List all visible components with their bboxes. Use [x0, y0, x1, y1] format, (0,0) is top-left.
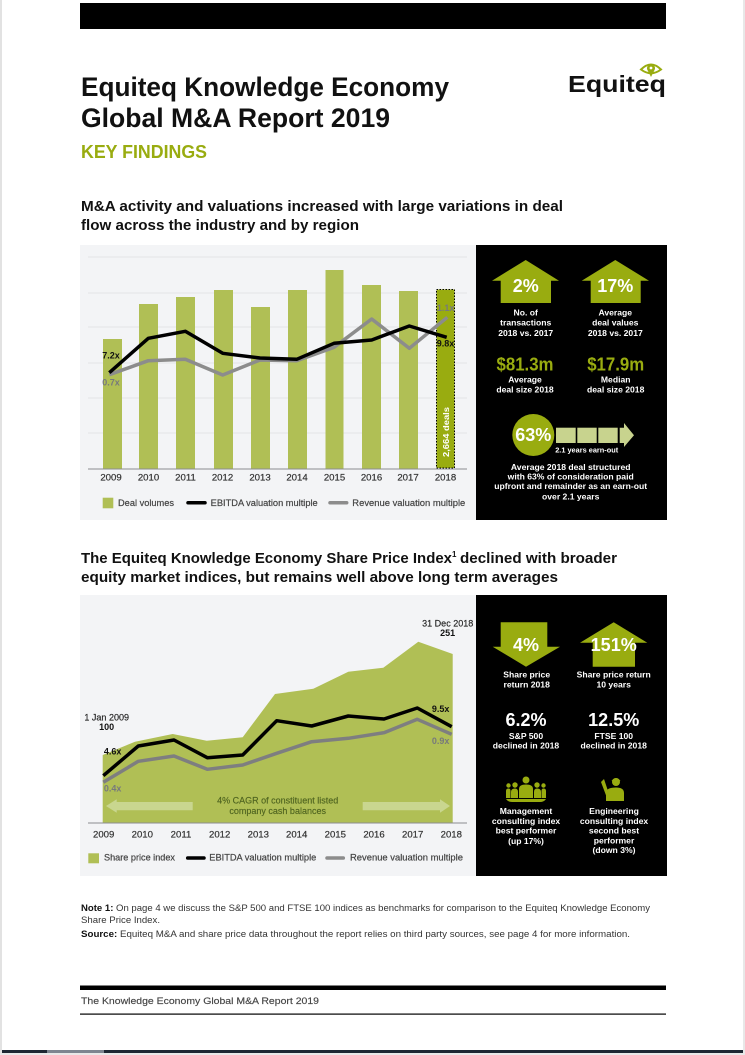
x axis years: 2017 — [402, 830, 423, 841]
stat: median deal size — [587, 355, 645, 395]
text: earn-out description: Average 2018 deal structured — [511, 462, 630, 472]
data labels: 251 — [440, 628, 455, 638]
circle: 63% — [512, 414, 554, 456]
heading: M&A activity: M&A activity and valuations increased with large variations in deal — [81, 199, 563, 215]
label: deal values: deal values — [592, 318, 639, 328]
label: engineering consulting: performer — [594, 835, 635, 845]
legend: Share price index — [104, 853, 175, 863]
legend: Revenue valuation multiple — [350, 853, 463, 863]
x axis years: 2016 — [361, 473, 382, 484]
label: deal values: Average — [598, 308, 632, 318]
stat: median deal size: $17.9m — [587, 355, 644, 375]
label: deal values: 2018 vs. 2017 — [588, 328, 643, 338]
arrow: share price return up 151% — [580, 622, 647, 667]
stat: S&P 500: S&P 500 — [509, 731, 543, 741]
x axis years: 2009 — [100, 473, 122, 484]
stat: FTSE 100: declined in 2018 — [580, 741, 647, 751]
notes: Note 1: On page 4 we discuss the S&P 500 and FTSE 100 indices as benchmarks for comparison to the Equiteq Knowledge Economy — [81, 903, 651, 913]
legend — [88, 853, 463, 863]
label: management consulting: Management — [500, 806, 552, 816]
highlighted bar 2018: 2,664 deals — [441, 407, 451, 457]
data labels: 7.2x — [102, 351, 120, 361]
x axis years: 2010 — [132, 830, 153, 841]
legend: EBITDA valuation multiple — [211, 498, 318, 508]
x axis years: 2014 — [286, 473, 308, 484]
arrow: share price return down 4% — [493, 622, 560, 667]
label: engineering consulting: second best — [589, 826, 639, 836]
stat: S&P 500: 6.2% — [505, 710, 547, 730]
heading: share price index: The Equiteq Knowledge Economy Share Price Index — [81, 551, 452, 567]
label: management consulting: consulting index — [492, 816, 560, 826]
arrow: deal values up 17% — [582, 260, 649, 303]
x axis years: 2012 — [209, 830, 230, 841]
stat: average deal size: deal size 2018 — [496, 385, 554, 395]
circle: 63%: 63% — [515, 425, 551, 445]
line: revenue multiple — [109, 317, 447, 375]
heading: share price index: 1 — [452, 550, 457, 559]
footer: The Knowledge Economy Global M&A Report 2019 — [81, 996, 319, 1007]
x axis years: 2017 — [397, 473, 419, 484]
data labels: 31 Dec 2018 — [422, 619, 473, 629]
stat: FTSE 100 — [580, 710, 647, 751]
label: transactions: 2018 vs. 2017 — [498, 328, 553, 338]
label: engineering consulting: Engineering — [589, 806, 639, 816]
panel: share price statistics — [476, 595, 667, 876]
line: EBITDA multiple — [109, 326, 447, 373]
x axis years: 2016 — [363, 830, 385, 841]
x axis years — [100, 473, 456, 484]
label: return 2018: Share price — [503, 669, 550, 679]
x axis years: 2010 — [138, 473, 159, 484]
data labels — [102, 303, 454, 388]
notes: Share Price Index. — [81, 915, 160, 925]
x axis years: 2018 — [435, 473, 456, 484]
x axis years: 2013 — [249, 473, 271, 484]
data labels: 100 — [99, 722, 114, 732]
arrow: transactions up 2%: 2% — [513, 276, 539, 296]
area: share price index — [103, 642, 453, 823]
text: earn-out description: upfront and remainder as an earn-out — [494, 481, 647, 491]
stat: average deal size: Average — [508, 375, 542, 385]
arrow: share price return down 4%: 4% — [513, 635, 539, 655]
icon: engineer — [601, 778, 624, 801]
x axis years: 2009 — [93, 830, 114, 841]
text: CAGR note: 4% CAGR of constituent listed — [217, 795, 338, 805]
label: return 10 years: 10 years — [596, 680, 631, 690]
x axis years: 2015 — [324, 473, 345, 484]
data labels: 1 Jan 2009 — [84, 713, 129, 723]
title: Global M&A Report 2019 — [81, 103, 390, 133]
text: CAGR note: company cash balances — [229, 806, 326, 816]
legend: Revenue valuation multiple — [352, 498, 465, 508]
subtitle: key findings: KEY FINDINGS — [81, 142, 207, 162]
panel: deal statistics — [476, 245, 667, 520]
title — [81, 72, 449, 133]
heading: M&A activity — [81, 199, 563, 234]
x axis years: 2011 — [171, 830, 191, 841]
title: Equiteq Knowledge Economy — [81, 72, 449, 102]
earn-out arrow: 2.1 years earn-out — [555, 445, 619, 454]
logo — [568, 64, 666, 97]
data labels: 0.9x — [432, 736, 449, 746]
scrollbar strip — [2, 1050, 743, 1053]
stat: S&P 500 — [493, 710, 559, 751]
label: management consulting: best performer — [496, 826, 557, 836]
data labels: 0.7x — [102, 378, 120, 388]
highlighted bar 2018 — [436, 290, 454, 468]
arrow: deal values up 17%: 17% — [597, 276, 633, 296]
stat: FTSE 100: FTSE 100 — [594, 731, 633, 741]
data labels: 9.5x — [432, 704, 449, 714]
text: earn-out description: with 63% of consideration paid — [507, 472, 634, 482]
heading: M&A activity: flow across the industry and by region — [81, 218, 359, 234]
arrow: transactions up 2% — [492, 260, 559, 303]
top black banner — [80, 3, 666, 29]
label: transactions: No. of — [514, 308, 538, 318]
stat: average deal size: $81.3m — [496, 355, 554, 375]
data labels: 9.8x — [437, 339, 454, 349]
label: return 2018: return 2018 — [504, 680, 550, 690]
heading: share price index — [81, 550, 617, 586]
stat: average deal size — [496, 355, 554, 395]
panel: deal volume chart — [80, 245, 476, 520]
heading: share price index: equity market indices, but remains well above long term averages — [81, 570, 558, 586]
legend: Deal volumes — [118, 498, 175, 508]
arrow: right — [363, 799, 450, 813]
x axis years: 2015 — [325, 830, 346, 841]
notes: Source: Equiteq M&A and share price data throughout the report relies on third party sources, see page 4 for more information. — [81, 929, 630, 939]
label: engineering consulting: consulting index — [580, 816, 648, 826]
data labels: 0.4x — [104, 783, 121, 793]
x axis years: 2014 — [286, 830, 308, 841]
arrow: share price return up 151%: 151% — [591, 635, 637, 655]
icon: management group — [506, 776, 546, 802]
notes — [81, 903, 651, 939]
stat: FTSE 100: 12.5% — [588, 710, 639, 730]
stat: median deal size: Median — [601, 375, 631, 385]
line: revenue multiple — [103, 719, 452, 782]
x axis years: 2013 — [248, 830, 269, 841]
logo: Equiteq — [568, 71, 666, 97]
bars: deal volumes — [103, 270, 418, 469]
legend: EBITDA valuation multiple — [209, 853, 316, 863]
heading: share price index: declined with broader — [460, 551, 617, 567]
arrow: left — [106, 799, 193, 813]
x axis years: 2018 — [441, 830, 462, 841]
label: engineering consulting: (down 3%) — [593, 845, 636, 855]
panel: share price chart — [80, 595, 476, 876]
x axis years: 2011 — [175, 473, 196, 484]
text: earn-out description: over 2.1 years — [542, 492, 600, 502]
x axis years — [93, 830, 462, 841]
footer — [80, 986, 666, 1015]
earn-out arrow — [555, 423, 634, 454]
label: transactions: transactions — [500, 318, 551, 328]
stat: S&P 500: declined in 2018 — [493, 741, 559, 751]
legend — [103, 498, 465, 508]
x axis years: 2012 — [212, 473, 233, 484]
data labels — [84, 619, 473, 793]
label: management consulting: (up 17%) — [508, 836, 544, 846]
data labels: 1.1x — [437, 303, 454, 313]
data labels: 4.6x — [104, 747, 121, 757]
label: return 10 years: Share price return — [577, 669, 651, 679]
stat: median deal size: deal size 2018 — [587, 385, 645, 395]
line: EBITDA multiple — [103, 708, 452, 776]
